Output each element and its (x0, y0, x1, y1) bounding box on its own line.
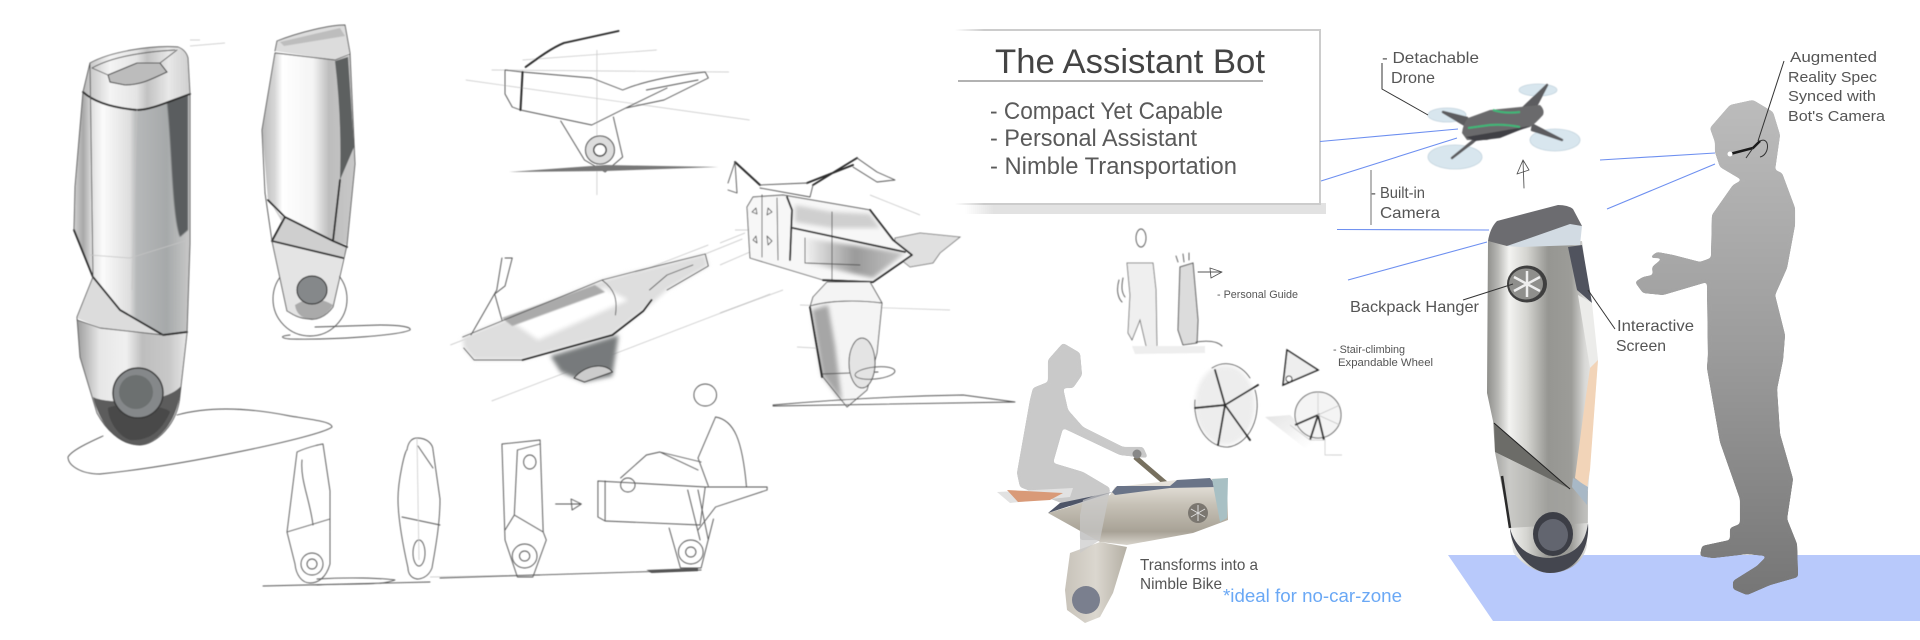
sketch: second rendered bot (262, 25, 410, 339)
label: built-in camera: Camera (1380, 205, 1440, 222)
logo badge (1507, 266, 1547, 302)
label: transforms into bike (1140, 557, 1258, 593)
sketch: bot line drawing front (263, 444, 430, 586)
note: no-car-zone: *ideal for no-car-zone (1223, 586, 1402, 606)
rider silhouette (1017, 343, 1148, 540)
text: feature list: - Compact Yet Capable (990, 98, 1223, 125)
rotors (1428, 84, 1580, 169)
label: augmented reality spec (1788, 49, 1886, 125)
sketch: mid bike with handle (450, 239, 770, 401)
label: interactive screen (1616, 318, 1694, 355)
arrow: personal guide direction (1198, 268, 1222, 278)
label: personal guide: - Personal Guide (1217, 289, 1298, 301)
label: stair-climbing wheel (1333, 344, 1433, 369)
sketch: upright bot before transformation (440, 440, 701, 578)
label: augmented reality spec: Reality Spec (1788, 69, 1878, 86)
label: transforms into bike: Nimble Bike (1140, 576, 1222, 593)
label: transforms into bike: Transforms into a (1140, 557, 1258, 574)
man silhouette (1635, 100, 1798, 595)
label: detachable drone: - Detachable (1382, 50, 1479, 67)
label: detachable drone (1382, 50, 1479, 87)
sketch: rider on bike (598, 384, 767, 573)
AR glasses (1728, 140, 1768, 158)
floor (1448, 555, 1920, 621)
label: augmented reality spec: Augmented (1790, 49, 1877, 66)
sketch: expandable wheels (1195, 350, 1342, 467)
sketch: personal guide figure and bot (1118, 229, 1222, 354)
Yamaha logo (1188, 503, 1208, 523)
label: built-in camera: - Built-in (1371, 185, 1425, 202)
label: interactive screen: Screen (1616, 338, 1666, 355)
label: interactive screen: Interactive (1617, 318, 1694, 335)
arrow: drone detaches (1517, 160, 1529, 188)
sketch: upper bike side view (466, 31, 750, 195)
text: feature list: - Nimble Transportation (990, 153, 1237, 180)
label: backpack hanger: Backpack Hanger (1350, 299, 1480, 316)
label: augmented reality spec: Synced with (1788, 88, 1876, 105)
label: stair-climbing wheel: - Stair-climbing (1333, 344, 1405, 356)
wheel (1533, 512, 1573, 556)
sketch: large rendered bot (68, 40, 332, 474)
label: augmented reality spec: Bot's Camera (1788, 108, 1886, 125)
arrow: transformation (556, 499, 581, 510)
text: feature list (990, 98, 1237, 180)
label: built-in camera (1371, 185, 1440, 222)
leader lines (1371, 61, 1784, 329)
bike render with rider (997, 343, 1228, 623)
main bot render (1487, 205, 1598, 573)
sketch: right bike front perspective (720, 158, 1015, 407)
blue view lines (1320, 129, 1715, 280)
label: detachable drone: Drone (1391, 70, 1435, 87)
label: stair-climbing wheel: Expandable Wheel (1338, 357, 1433, 369)
drone (1428, 84, 1580, 169)
text: feature list: - Personal Assistant (990, 125, 1197, 152)
heading: title: The Assistant Bot (995, 43, 1266, 81)
panel: title card (955, 29, 1326, 214)
sketch: bot line drawing side (398, 438, 540, 579)
